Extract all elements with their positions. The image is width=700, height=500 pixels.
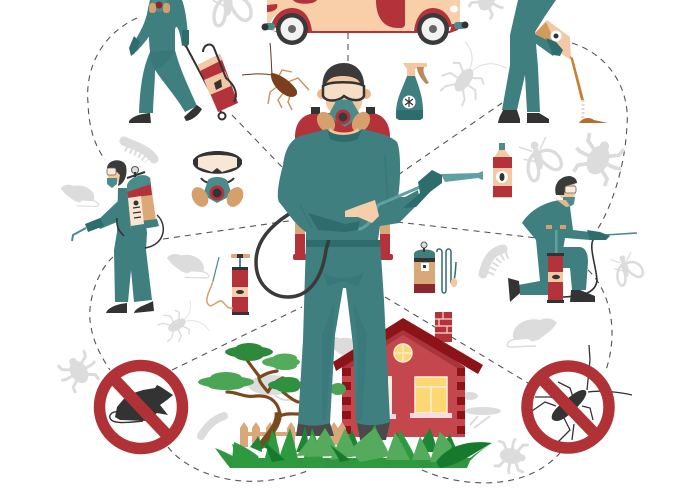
tank gauge <box>132 166 138 174</box>
trousers <box>298 240 390 426</box>
hose <box>256 214 330 297</box>
main exterminator <box>256 63 483 440</box>
icon: grey bug lower left <box>54 348 104 396</box>
hose <box>563 238 597 297</box>
worker boots <box>106 303 127 313</box>
worker arms and body <box>131 0 172 52</box>
icon: grey caterpillar left <box>124 141 154 160</box>
no cockroach sign <box>527 345 632 448</box>
worker legs and torso <box>114 188 152 302</box>
icon: grey bug right <box>567 131 629 189</box>
icon: grey rat behind legs <box>326 337 368 361</box>
van wheels <box>276 13 308 45</box>
house <box>333 312 483 437</box>
worker top left with trolley sprayer <box>129 0 238 123</box>
powder stream <box>570 56 584 100</box>
hose <box>117 215 163 248</box>
trolley sprayer <box>186 46 222 114</box>
van door <box>376 0 405 28</box>
fence <box>240 422 346 447</box>
bonsai tree <box>198 343 346 447</box>
foliage middle <box>268 377 304 392</box>
worker left with backpack sprayer <box>72 160 163 313</box>
icon: grey roach top right <box>434 40 507 115</box>
van body <box>267 0 460 31</box>
worker torso <box>522 200 590 270</box>
pump sprayer <box>545 224 567 230</box>
foliage left <box>198 372 254 390</box>
sign ring <box>100 366 182 448</box>
icon: grey fly right <box>518 135 564 182</box>
icon: grey rat lower right <box>507 318 557 347</box>
van <box>262 0 468 45</box>
icon: brown cockroach <box>242 43 309 110</box>
hair <box>323 63 364 92</box>
worker top right spreading powder <box>498 0 608 123</box>
worker back leg <box>518 240 552 295</box>
grass mid blades <box>232 424 452 468</box>
worker mask <box>151 0 167 12</box>
icon: grey fly top <box>211 0 251 26</box>
foliage dark top <box>225 343 273 361</box>
grass dark front blades <box>262 440 492 468</box>
worker arm <box>96 201 130 229</box>
chimney <box>435 312 452 342</box>
sprayer wand <box>352 187 420 229</box>
foliage behind leg <box>330 383 346 395</box>
goggles <box>323 82 364 100</box>
icon: tank with coiled hose <box>414 242 457 293</box>
head <box>313 63 374 136</box>
worker boots <box>508 278 520 302</box>
right glove <box>403 170 442 208</box>
worker glove <box>85 218 104 232</box>
backpack tanks <box>295 113 390 150</box>
icon: grey rat centre left <box>167 254 209 278</box>
grass base <box>215 443 492 468</box>
left glove <box>308 213 360 232</box>
window right <box>415 377 447 413</box>
van bumpers <box>264 23 275 30</box>
grass <box>215 424 492 468</box>
worker head <box>558 180 576 200</box>
worker boots <box>129 113 151 123</box>
foliage light right <box>262 354 300 370</box>
torso with arms <box>278 129 420 240</box>
worker glove <box>546 38 563 56</box>
face <box>326 70 362 114</box>
belt <box>306 240 380 247</box>
no rats sign <box>100 366 182 448</box>
icon: grey bug top right <box>464 0 510 22</box>
icon: grey caterpillar bottom <box>201 416 224 436</box>
backpack tank <box>127 178 157 230</box>
worker body <box>502 0 556 112</box>
wand <box>605 233 637 235</box>
round window <box>394 344 412 362</box>
icon: grey rat left <box>61 185 99 207</box>
icon: cockroach silhouette <box>532 345 632 442</box>
worker glove <box>587 230 610 240</box>
icon: grey fly far right <box>610 250 645 287</box>
dashed connector lines <box>88 18 627 483</box>
worker head <box>107 164 125 182</box>
hand <box>345 200 379 223</box>
icon: grey roach lower left <box>155 299 209 352</box>
icon: respirator mask with goggles <box>188 151 247 210</box>
grass dark back blades <box>250 426 458 452</box>
window left sliver <box>388 376 392 414</box>
icon: spray bottle <box>396 63 429 120</box>
icon: grey bug bottom right <box>493 435 529 477</box>
tree trunk and branches <box>227 360 298 447</box>
grass light blades <box>296 428 452 462</box>
powder bag <box>533 20 571 60</box>
corner bricks <box>342 368 465 434</box>
worker boots <box>498 110 520 123</box>
respirator <box>328 100 361 127</box>
icon: grey roach behind house <box>462 392 501 428</box>
roof <box>333 318 483 374</box>
powder pile <box>579 118 608 123</box>
sign ring <box>527 366 609 448</box>
nozzle <box>72 228 86 241</box>
sign slash <box>542 379 595 434</box>
icon: grey rat behind tree <box>248 375 305 405</box>
boots <box>296 423 334 436</box>
sign slash <box>113 378 167 435</box>
icon: red spray can <box>493 143 512 198</box>
icon: hand pump sprayer <box>207 254 250 315</box>
worker front leg <box>545 247 588 290</box>
icon: grey caterpillar right <box>483 249 508 276</box>
icon: rat silhouette <box>110 385 173 423</box>
worker right kneeling with pump sprayer <box>508 176 637 303</box>
worker gloves <box>129 36 140 56</box>
van headlight <box>450 6 458 12</box>
house wall <box>342 328 465 437</box>
